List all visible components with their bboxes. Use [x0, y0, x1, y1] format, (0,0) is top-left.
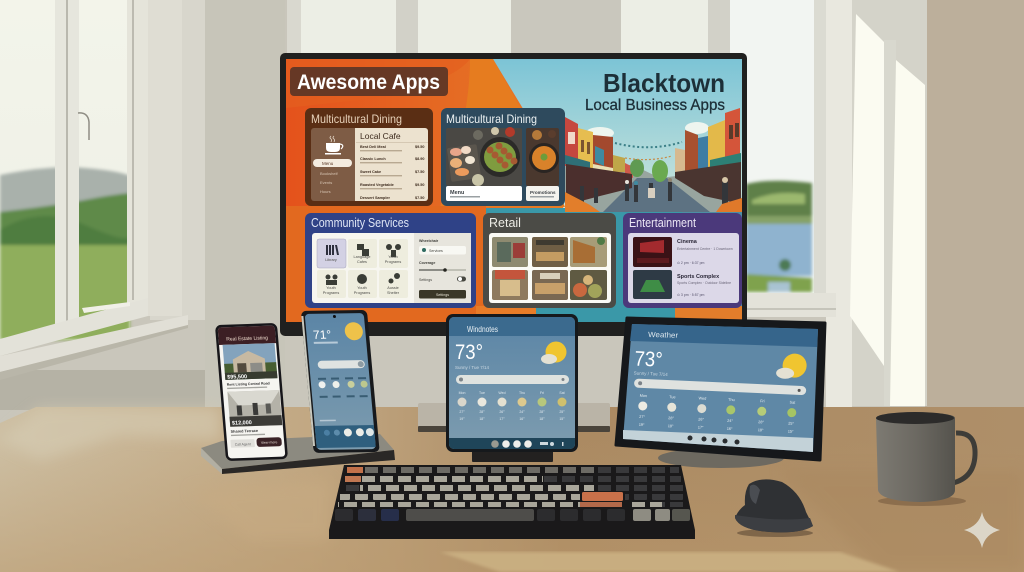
icon: sun behind cloud: [541, 342, 566, 364]
main street illustration: [565, 108, 742, 212]
tiles: service shortcuts: Youth: [326, 286, 336, 290]
settings column: Coverage: [419, 261, 435, 265]
entertainment listings: [677, 239, 733, 297]
listing photo: house: $95,500: [227, 374, 247, 381]
foldable: weather app: 73°: [455, 341, 483, 364]
left window with countryside view: [0, 0, 188, 380]
food photo: sushi and skewers: [446, 127, 522, 186]
phone: weather app: 71°: [312, 328, 332, 342]
forecast row: 18°: [539, 417, 545, 421]
foldable stand: [472, 451, 553, 462]
phone: real estate listing: Real Estate Listing: [226, 335, 268, 343]
phone dock: [201, 434, 395, 474]
panel: Multicultural Dining menu: $7.50: [415, 170, 425, 174]
tablet: weather app: [616, 318, 825, 460]
forecast row: 18°: [479, 417, 485, 421]
number row: [345, 476, 681, 482]
forecast row: Fri: [540, 391, 544, 395]
forecast row: 26°: [499, 410, 505, 414]
tiles: service shortcuts: Youth: [388, 255, 398, 259]
panel: Multicultural Dining menu: Local Cafe: [360, 131, 401, 141]
tablet weather content: Sunny / Tue 7/14: [634, 370, 668, 377]
forecast row: 26°: [698, 417, 705, 422]
forecast row: 27°: [639, 415, 646, 419]
monitor screen background: [286, 59, 742, 322]
panel: Multicultural Dining food photos: Menu: [450, 190, 464, 196]
monitor stand base: [418, 403, 610, 432]
heading: Blacktown: Blacktown: [603, 68, 725, 98]
keyboard: [329, 465, 695, 539]
forecast row: 19°: [639, 423, 645, 427]
title badge: Awesome Apps: Awesome Apps: [297, 71, 440, 94]
phone: real estate listing: Rent Listing Central Road: [227, 381, 270, 387]
shop photo 4: [492, 270, 528, 300]
forecast row: Sat: [559, 391, 565, 395]
forecast row: Wed: [498, 391, 506, 395]
tiles: service shortcuts: Library: [325, 258, 337, 262]
coffee mug: [876, 412, 975, 506]
shop photo 5: [532, 270, 568, 300]
panel: Community Services: Community Services: [311, 216, 409, 230]
forecast row: Tue: [669, 395, 676, 399]
forecast row: 28°: [668, 416, 675, 420]
bottom row: [335, 509, 690, 521]
shop photo 2: [532, 237, 568, 267]
forecast row: Thu: [519, 391, 525, 395]
panel: Multicultural Dining menu: $8.90: [415, 157, 425, 161]
forecast row: 27°: [459, 410, 465, 414]
function row: [347, 467, 679, 473]
settings column: Wheelchair: [419, 239, 439, 243]
settings column: Settings: [436, 293, 449, 297]
panel: Multicultural Dining menu: Menu: [322, 161, 334, 166]
entertainment listings: ⊙ 2 pm · 6:37 pm: [677, 261, 705, 265]
shop photo 3: [570, 237, 607, 267]
panel: Multicultural Dining menu: [305, 108, 433, 206]
phone: real estate listing: View more: [261, 440, 278, 445]
panel: Multicultural Dining menu: Best Deli Meal: [360, 145, 386, 149]
forecast row: Mon: [459, 391, 465, 395]
panel: Entertainment: Entertainment: [629, 216, 696, 230]
panel: Entertainment: [623, 213, 742, 308]
tablet stand: [658, 448, 784, 468]
panel: Multicultural Dining menu: Hours: [320, 189, 331, 194]
forecast row: 16°: [727, 427, 733, 431]
right window with lake view: [730, 0, 852, 410]
forecast row: 25°: [559, 410, 565, 414]
forecast row: 15°: [559, 417, 565, 421]
food photo: stew bowl: [526, 128, 559, 186]
sunlight beams on right wall: [850, 0, 927, 406]
icon: sparkle watermark: [964, 512, 1000, 548]
tablet weather content: 73°: [634, 347, 663, 372]
forecast row: 18°: [668, 424, 674, 428]
tiles: service shortcuts: Programs: [385, 260, 401, 264]
monitor: [280, 53, 747, 336]
panel: Multicultural Dining food photos: [441, 108, 565, 206]
forecast row: [458, 391, 566, 421]
tiles: service shortcuts: Youth: [357, 286, 367, 290]
foldable: weather app: [446, 314, 578, 452]
entertainment listings: ⊙ 3 pm · 5:57 pm: [677, 293, 705, 297]
entertainment listings: Sports Complex · Outdoor Sideline: [677, 281, 731, 285]
entertainment listings: Entertainment Centre · 1 Downtown: [677, 247, 733, 251]
shop photo 1: [492, 237, 528, 267]
search bar: [456, 375, 569, 384]
panel: Multicultural Dining menu: Bookshelf: [320, 171, 338, 176]
phone: weather app: [301, 310, 380, 453]
tiles: service shortcuts: Programs: [354, 291, 370, 295]
cinema photo: [633, 237, 672, 267]
forecast row: 17°: [499, 417, 505, 421]
settings column: Settings: [419, 278, 432, 282]
panel: Retail: [483, 213, 616, 308]
phone: real estate listing: Shared Terrace: [231, 429, 258, 434]
tablet: weather app: Weather: [648, 330, 679, 340]
forecast row: Tue: [479, 391, 485, 395]
mouse: [735, 479, 813, 537]
tablet weather content: [631, 346, 808, 434]
phone: real estate listing: [215, 323, 288, 461]
panel: Community Services: [305, 213, 476, 308]
foldable: weather app: Windnotes: [467, 325, 498, 334]
forecast row: Thu: [728, 398, 735, 402]
forecast row: Wed: [698, 396, 706, 401]
entertainment listings: Sports Complex: [677, 274, 720, 280]
back window panes above monitor: [287, 0, 730, 54]
forecast row: [637, 394, 797, 434]
settings column: [419, 239, 466, 298]
tiles: service shortcuts: Aussie: [387, 286, 399, 290]
desk: [0, 407, 1024, 572]
forecast row: 19°: [459, 417, 465, 421]
forecast row: 25°: [788, 422, 795, 426]
foldable: weather app: Sunny / Tue 7/14: [455, 365, 490, 370]
tiles: service shortcuts: Shelter: [387, 291, 400, 295]
forecast row: 24°: [727, 419, 734, 423]
icon: sun behind cloud: [776, 353, 807, 380]
icon: sun: [344, 322, 364, 340]
forecast row: 17°: [698, 425, 704, 430]
dock icons: [688, 436, 740, 444]
panel: Retail: Retail: [489, 216, 521, 230]
tiles: service shortcuts: Programs: [323, 291, 339, 295]
panel: Multicultural Dining menu: Multicultural Dining: [311, 112, 402, 126]
dock: [449, 438, 575, 449]
stadium photo: [633, 270, 672, 299]
panel: Multicultural Dining menu: $9.50: [415, 145, 425, 149]
tiles: service shortcuts: Cafes: [357, 260, 367, 264]
panel: Multicultural Dining food photos: Multicultural Dining: [446, 112, 537, 126]
forecast row: 28°: [539, 410, 545, 414]
search bar: [634, 378, 806, 395]
listing photo: interior: $12,000: [232, 420, 252, 427]
tiles: service shortcuts: [317, 239, 408, 298]
settings column: Services: [429, 249, 443, 253]
icon: coffee cup: [325, 136, 343, 154]
panel: Multicultural Dining food photos: Promotions: [530, 190, 556, 195]
forecast row: 15°: [788, 430, 794, 434]
forecast row: 24°: [519, 410, 525, 414]
forecast row: Sat: [789, 401, 796, 405]
forecast row: 16°: [519, 417, 525, 421]
panel: Multicultural Dining menu: $9.50: [415, 183, 425, 187]
panel: Multicultural Dining menu: Classic Lunch: [360, 157, 386, 161]
panel: Multicultural Dining menu: Events: [320, 180, 332, 185]
forecast row: Fri: [760, 399, 765, 403]
panel: Multicultural Dining menu: Sweet Cake: [360, 170, 381, 174]
phone: real estate listing: Call Agent: [235, 442, 251, 447]
forecast row: 28°: [479, 410, 485, 414]
tiles: service shortcuts: Language: [354, 255, 370, 259]
panel: Multicultural Dining menu: $7.50: [415, 196, 425, 200]
forecast row: 28°: [758, 420, 765, 424]
letter rows: [338, 485, 688, 507]
shop photo 6: [570, 270, 607, 300]
subheading: Local Business Apps: Local Business Apps: [585, 97, 725, 114]
panel: Multicultural Dining menu: Roasted Vegetable: [360, 183, 394, 187]
panel: Multicultural Dining menu: Dessert Sampler: [360, 196, 390, 200]
forecast row: 18°: [758, 428, 764, 432]
forecast row: Mon: [640, 394, 647, 398]
entertainment listings: Cinema: [677, 239, 698, 245]
